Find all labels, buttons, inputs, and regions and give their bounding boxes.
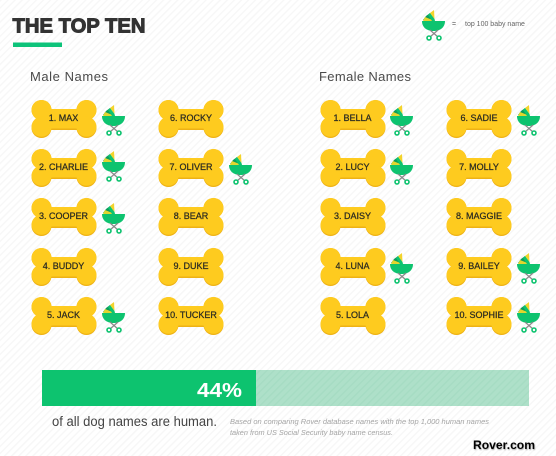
footnote: taken from US Social Security baby name census. bbox=[230, 428, 393, 437]
percentage label: 44% bbox=[197, 380, 242, 402]
name: 4. Luna: 4. LUNA bbox=[335, 261, 370, 271]
heading: male names: Male Names bbox=[30, 69, 108, 84]
name: 10. Sophie: 10. SOPHIE bbox=[454, 310, 504, 320]
icon: stroller legend bbox=[422, 10, 445, 40]
name: 10. Sophie bbox=[446, 297, 540, 335]
name: 2. Charlie: 2. CHARLIE bbox=[39, 162, 88, 172]
name: 7. Molly bbox=[446, 149, 512, 187]
name: 8. Maggie: 8. MAGGIE bbox=[456, 211, 502, 221]
name: 5. Jack: 5. JACK bbox=[47, 310, 80, 320]
name: 3. Cooper: 3. COOPER bbox=[39, 211, 89, 221]
name: 1. Max bbox=[32, 100, 125, 138]
title underline bbox=[13, 42, 62, 47]
name: 4. Buddy bbox=[32, 248, 96, 286]
name: 5. Lola bbox=[320, 297, 386, 335]
name: 9. Duke: 9. DUKE bbox=[173, 261, 209, 271]
name: 1. Max: 1. MAX bbox=[49, 113, 78, 123]
name: 6. Rocky bbox=[158, 100, 224, 138]
name: 3. Daisy: 3. DAISY bbox=[334, 211, 371, 221]
name: 1. Bella bbox=[320, 100, 413, 138]
name: 3. Daisy bbox=[320, 198, 386, 236]
legend bbox=[422, 10, 525, 40]
name: 6. Rocky: 6. ROCKY bbox=[170, 113, 212, 123]
name: 4. Buddy: 4. BUDDY bbox=[43, 261, 84, 271]
source: Rover.com: Rover.com bbox=[473, 438, 535, 452]
name: 2. Lucy: 2. LUCY bbox=[335, 162, 370, 172]
legend: top 100 baby name bbox=[465, 21, 525, 28]
name: 9. Bailey bbox=[446, 248, 540, 286]
panel: female names bbox=[320, 100, 540, 335]
name: 8. Bear: 8. BEAR bbox=[174, 211, 209, 221]
caption: of all dog names are human. bbox=[52, 414, 217, 429]
name: 4. Luna bbox=[320, 248, 413, 286]
panel: male names bbox=[32, 100, 252, 335]
heading: female names: Female Names bbox=[319, 69, 412, 84]
name: 9. Duke bbox=[158, 248, 224, 286]
name: 6. Sadie: 6. SADIE bbox=[460, 113, 498, 123]
name: 5. Jack bbox=[32, 297, 125, 335]
footnote: Based on comparing Rover database names with the top 1,000 human names bbox=[230, 417, 489, 426]
name: 10. Tucker bbox=[158, 297, 224, 335]
name: 7. Oliver bbox=[158, 149, 252, 187]
name: 7. Molly: 7. MOLLY bbox=[459, 162, 499, 172]
name: 1. Bella: 1. BELLA bbox=[333, 113, 372, 123]
name: 5. Lola: 5. LOLA bbox=[336, 310, 369, 320]
name: 3. Cooper bbox=[32, 198, 125, 236]
name: 7. Oliver: 7. OLIVER bbox=[169, 162, 213, 172]
name: 10. Tucker: 10. TUCKER bbox=[165, 310, 217, 320]
progress bar: 44% bbox=[42, 370, 529, 406]
name: 8. Maggie bbox=[446, 198, 512, 236]
name: 2. Charlie bbox=[32, 149, 125, 187]
name: 9. Bailey: 9. BAILEY bbox=[458, 261, 500, 271]
footnote bbox=[230, 417, 489, 437]
name: 6. Sadie bbox=[446, 100, 540, 138]
name: 2. Lucy bbox=[320, 149, 413, 187]
title: THE TOP TEN bbox=[12, 14, 146, 38]
name: 8. Bear bbox=[158, 198, 224, 236]
legend text: = bbox=[452, 21, 456, 28]
